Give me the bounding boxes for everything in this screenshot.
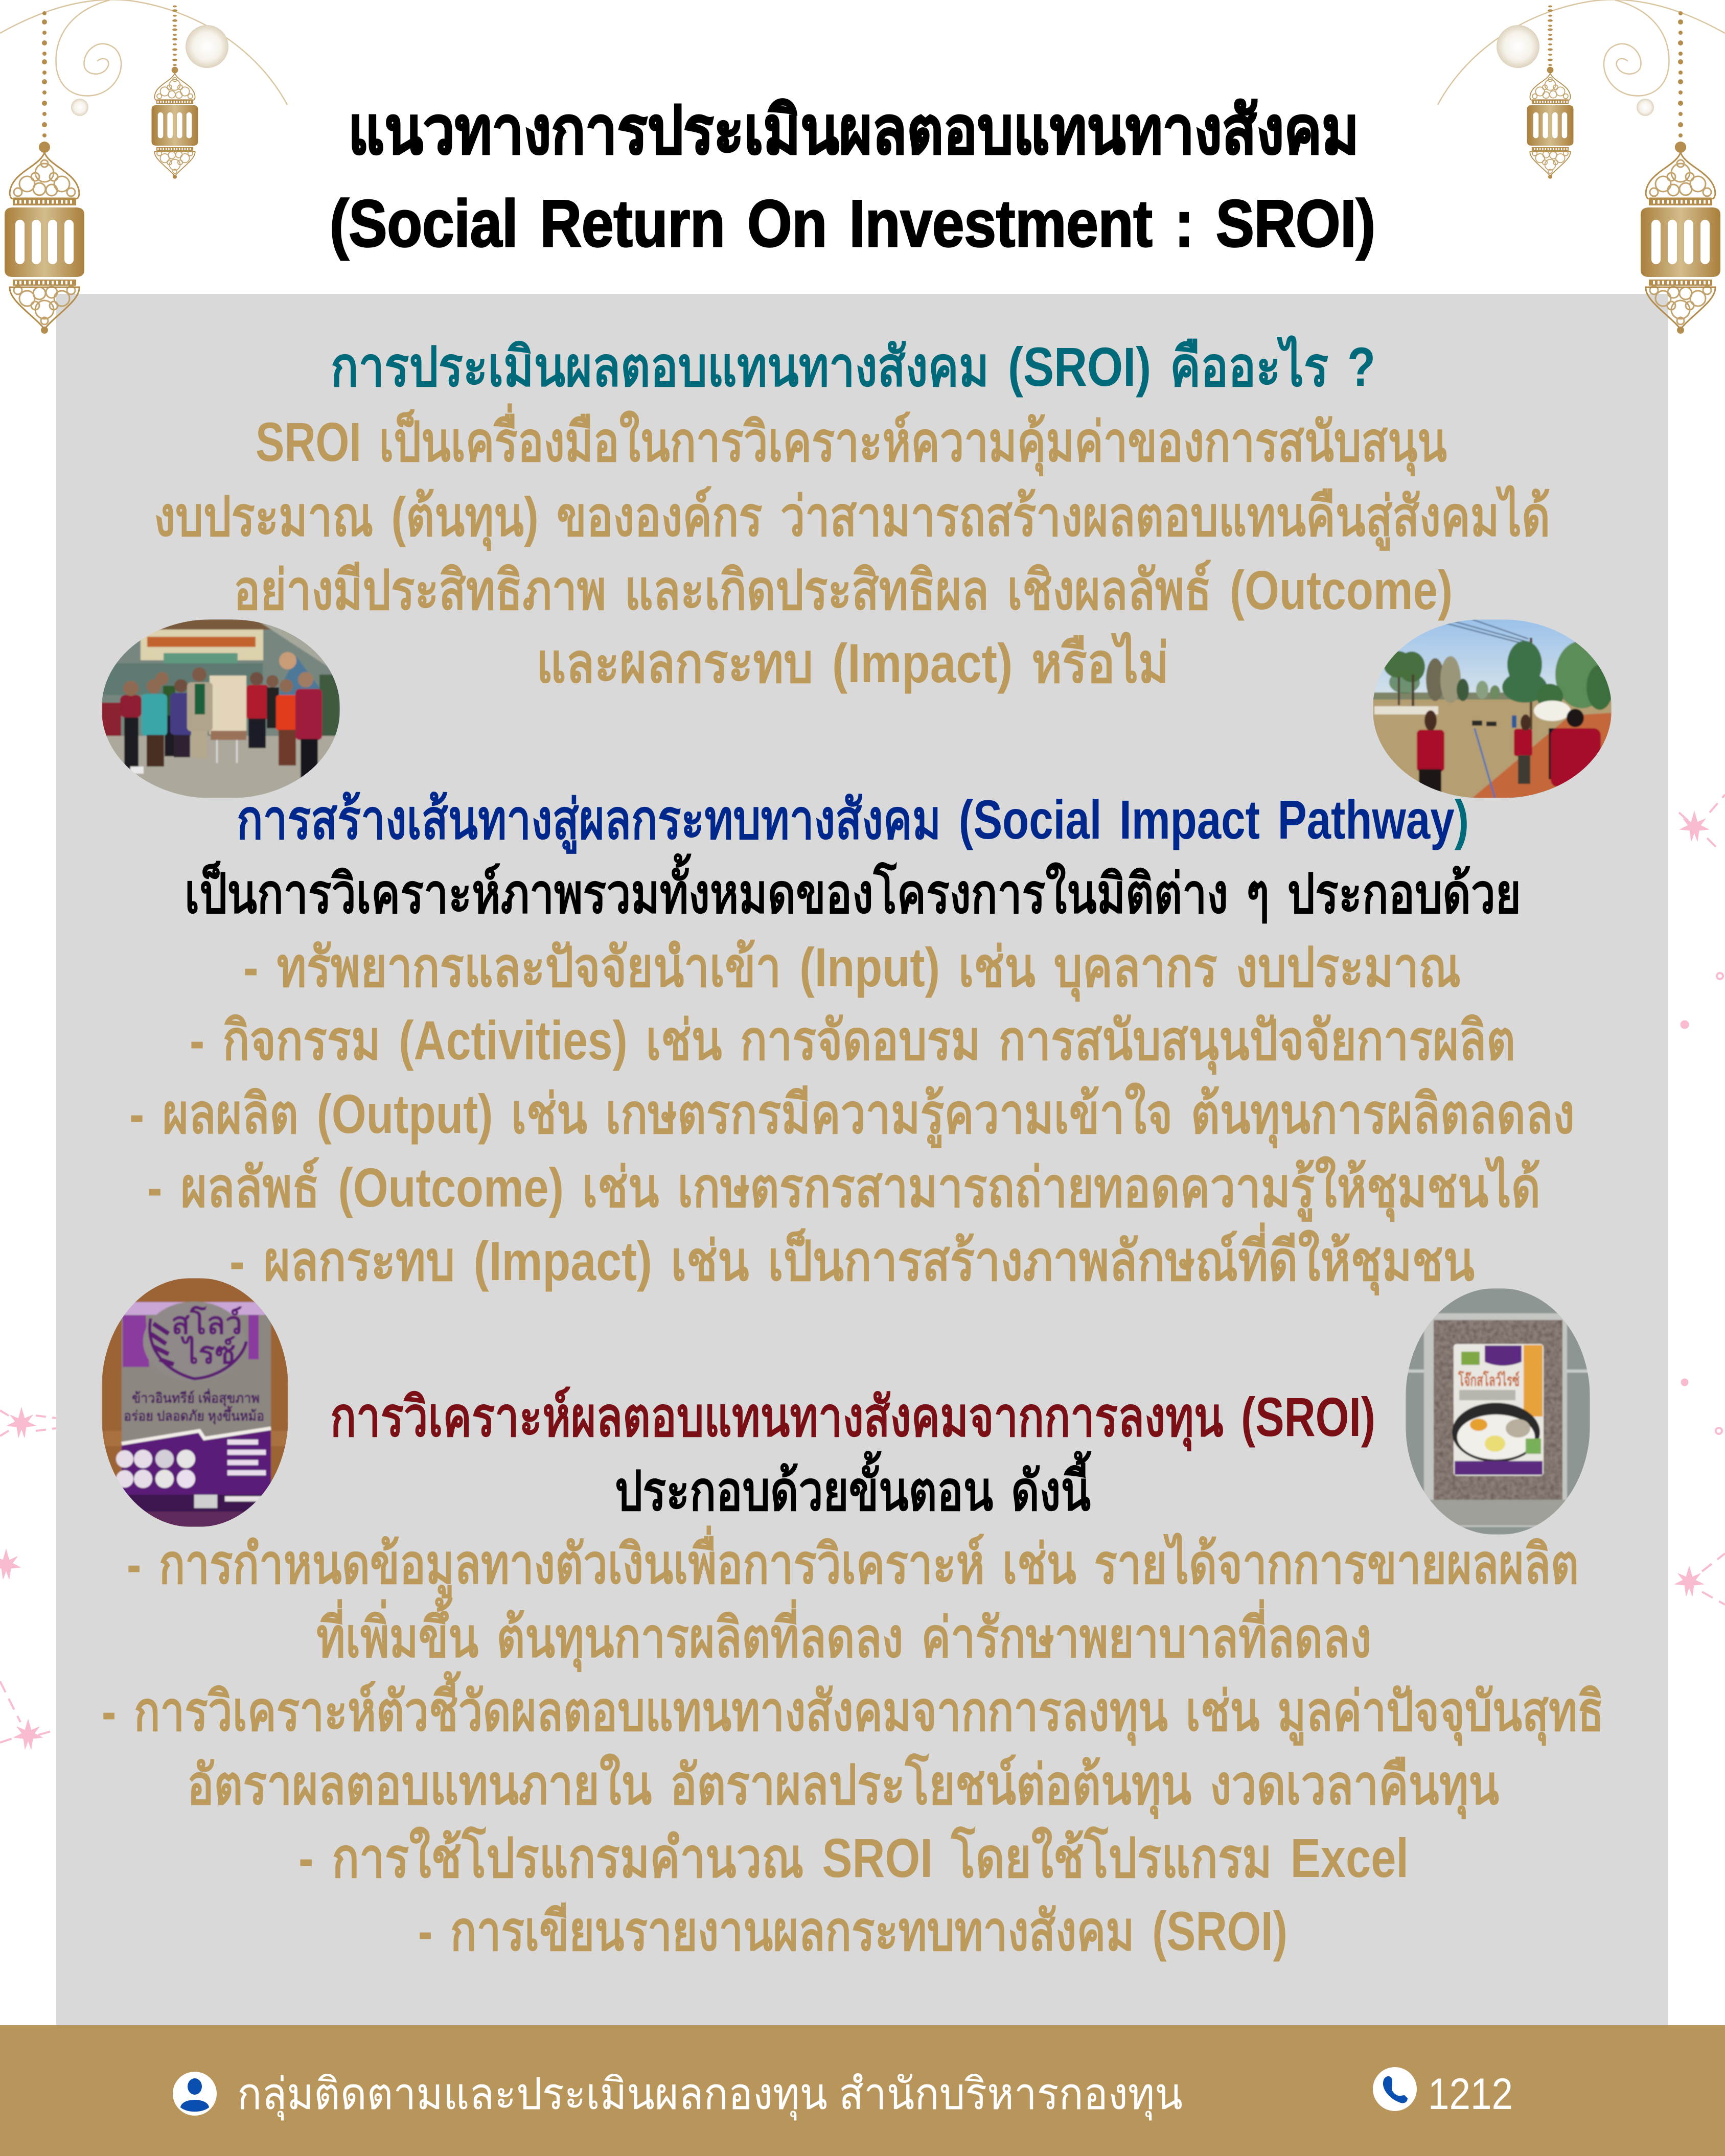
heading: what is SROI: การประเมินผลตอบแทนทางสังคม (SROI) คืออะไร ? [331, 335, 1375, 398]
decorative pink sparkles on the margins [0, 795, 1725, 1749]
photo: Slow Rice porridge package [1406, 1288, 1590, 1535]
icon: person [173, 2072, 217, 2116]
footer bar [0, 2025, 1725, 2156]
lantern decoration: top right [1438, 0, 1725, 334]
title: แนวทางการประเมินผลตอบแทนทางสังคม [348, 93, 1359, 168]
photo: team surveying a field [1373, 619, 1613, 800]
photo: Slow Rice product bag [102, 1278, 288, 1527]
list: SROI analysis steps [102, 1450, 1604, 1962]
list: SROI analysis steps: - การเขียนรายงานผลกระทบทางสังคม (SROI) [418, 1900, 1287, 1962]
photo: group of people at Slow love farm [102, 619, 340, 798]
list: impact pathway components [129, 853, 1575, 1296]
heading: SROI analysis: การวิเคราะห์ผลตอบแทนทางสังคมจากการลงทุน (SROI) [330, 1386, 1375, 1452]
photo: Slow Rice product bag: สโลว์ [171, 1305, 242, 1340]
text block: SROI definition [154, 403, 1550, 694]
list: SROI analysis steps: ที่เพิ่มขึ้น ต้นทุนการผลิตที่ลดลง ค่ารักษาพยาบาลที่ลดลง [316, 1597, 1371, 1673]
list: SROI analysis steps: ประกอบด้วยขั้นตอน ดังนี้ [615, 1450, 1092, 1522]
text block: SROI definition: อย่างมีประสิทธิภาพ และเกิดประสิทธิผล เชิงผลลัพธ์ (Outcome) [234, 559, 1453, 621]
list: impact pathway components: - ผลกระทบ (Impact) เช่น เป็นการสร้างภาพลักษณ์ที่ดีให้ชุมชน [229, 1222, 1475, 1296]
panel: grey content background [56, 294, 1668, 2025]
title: (Social Return On Investment : SROI) [330, 186, 1375, 261]
title [330, 93, 1375, 261]
list: SROI analysis steps: - การใช้โปรแกรมคำนวณ SROI โดยใช้โปรแกรม Excel [298, 1826, 1409, 1889]
footer text: department name: กลุ่มติดตามและประเมินผลกองทุน สำนักบริหารกองทุน [237, 2070, 1183, 2121]
photo: Slow Rice product bag: ไรซ์ [180, 1335, 236, 1370]
footer text: hotline number: 1212 [1428, 2070, 1513, 2119]
lantern decoration: top left [0, 0, 287, 334]
text block: SROI definition: และผลกระทบ (Impact) หรือไม่ [536, 632, 1169, 694]
people [120, 695, 142, 717]
icon: phone [1373, 2067, 1417, 2111]
list: impact pathway components: - ทรัพยากรและปัจจัยนำเข้า (Input) เช่น บุคลากร งบประมาณ [243, 936, 1461, 1002]
photo: Slow Rice porridge package: โจ๊กสโลว์ไรซ์ [1458, 1371, 1520, 1389]
photo: Slow Rice product bag: ข้าวอินทรีย์ เพื่อสุขภาพ [132, 1388, 260, 1407]
photo: Slow Rice product bag: อร่อย ปลอดภัย หุงขึ้นหม้อ [124, 1405, 264, 1425]
